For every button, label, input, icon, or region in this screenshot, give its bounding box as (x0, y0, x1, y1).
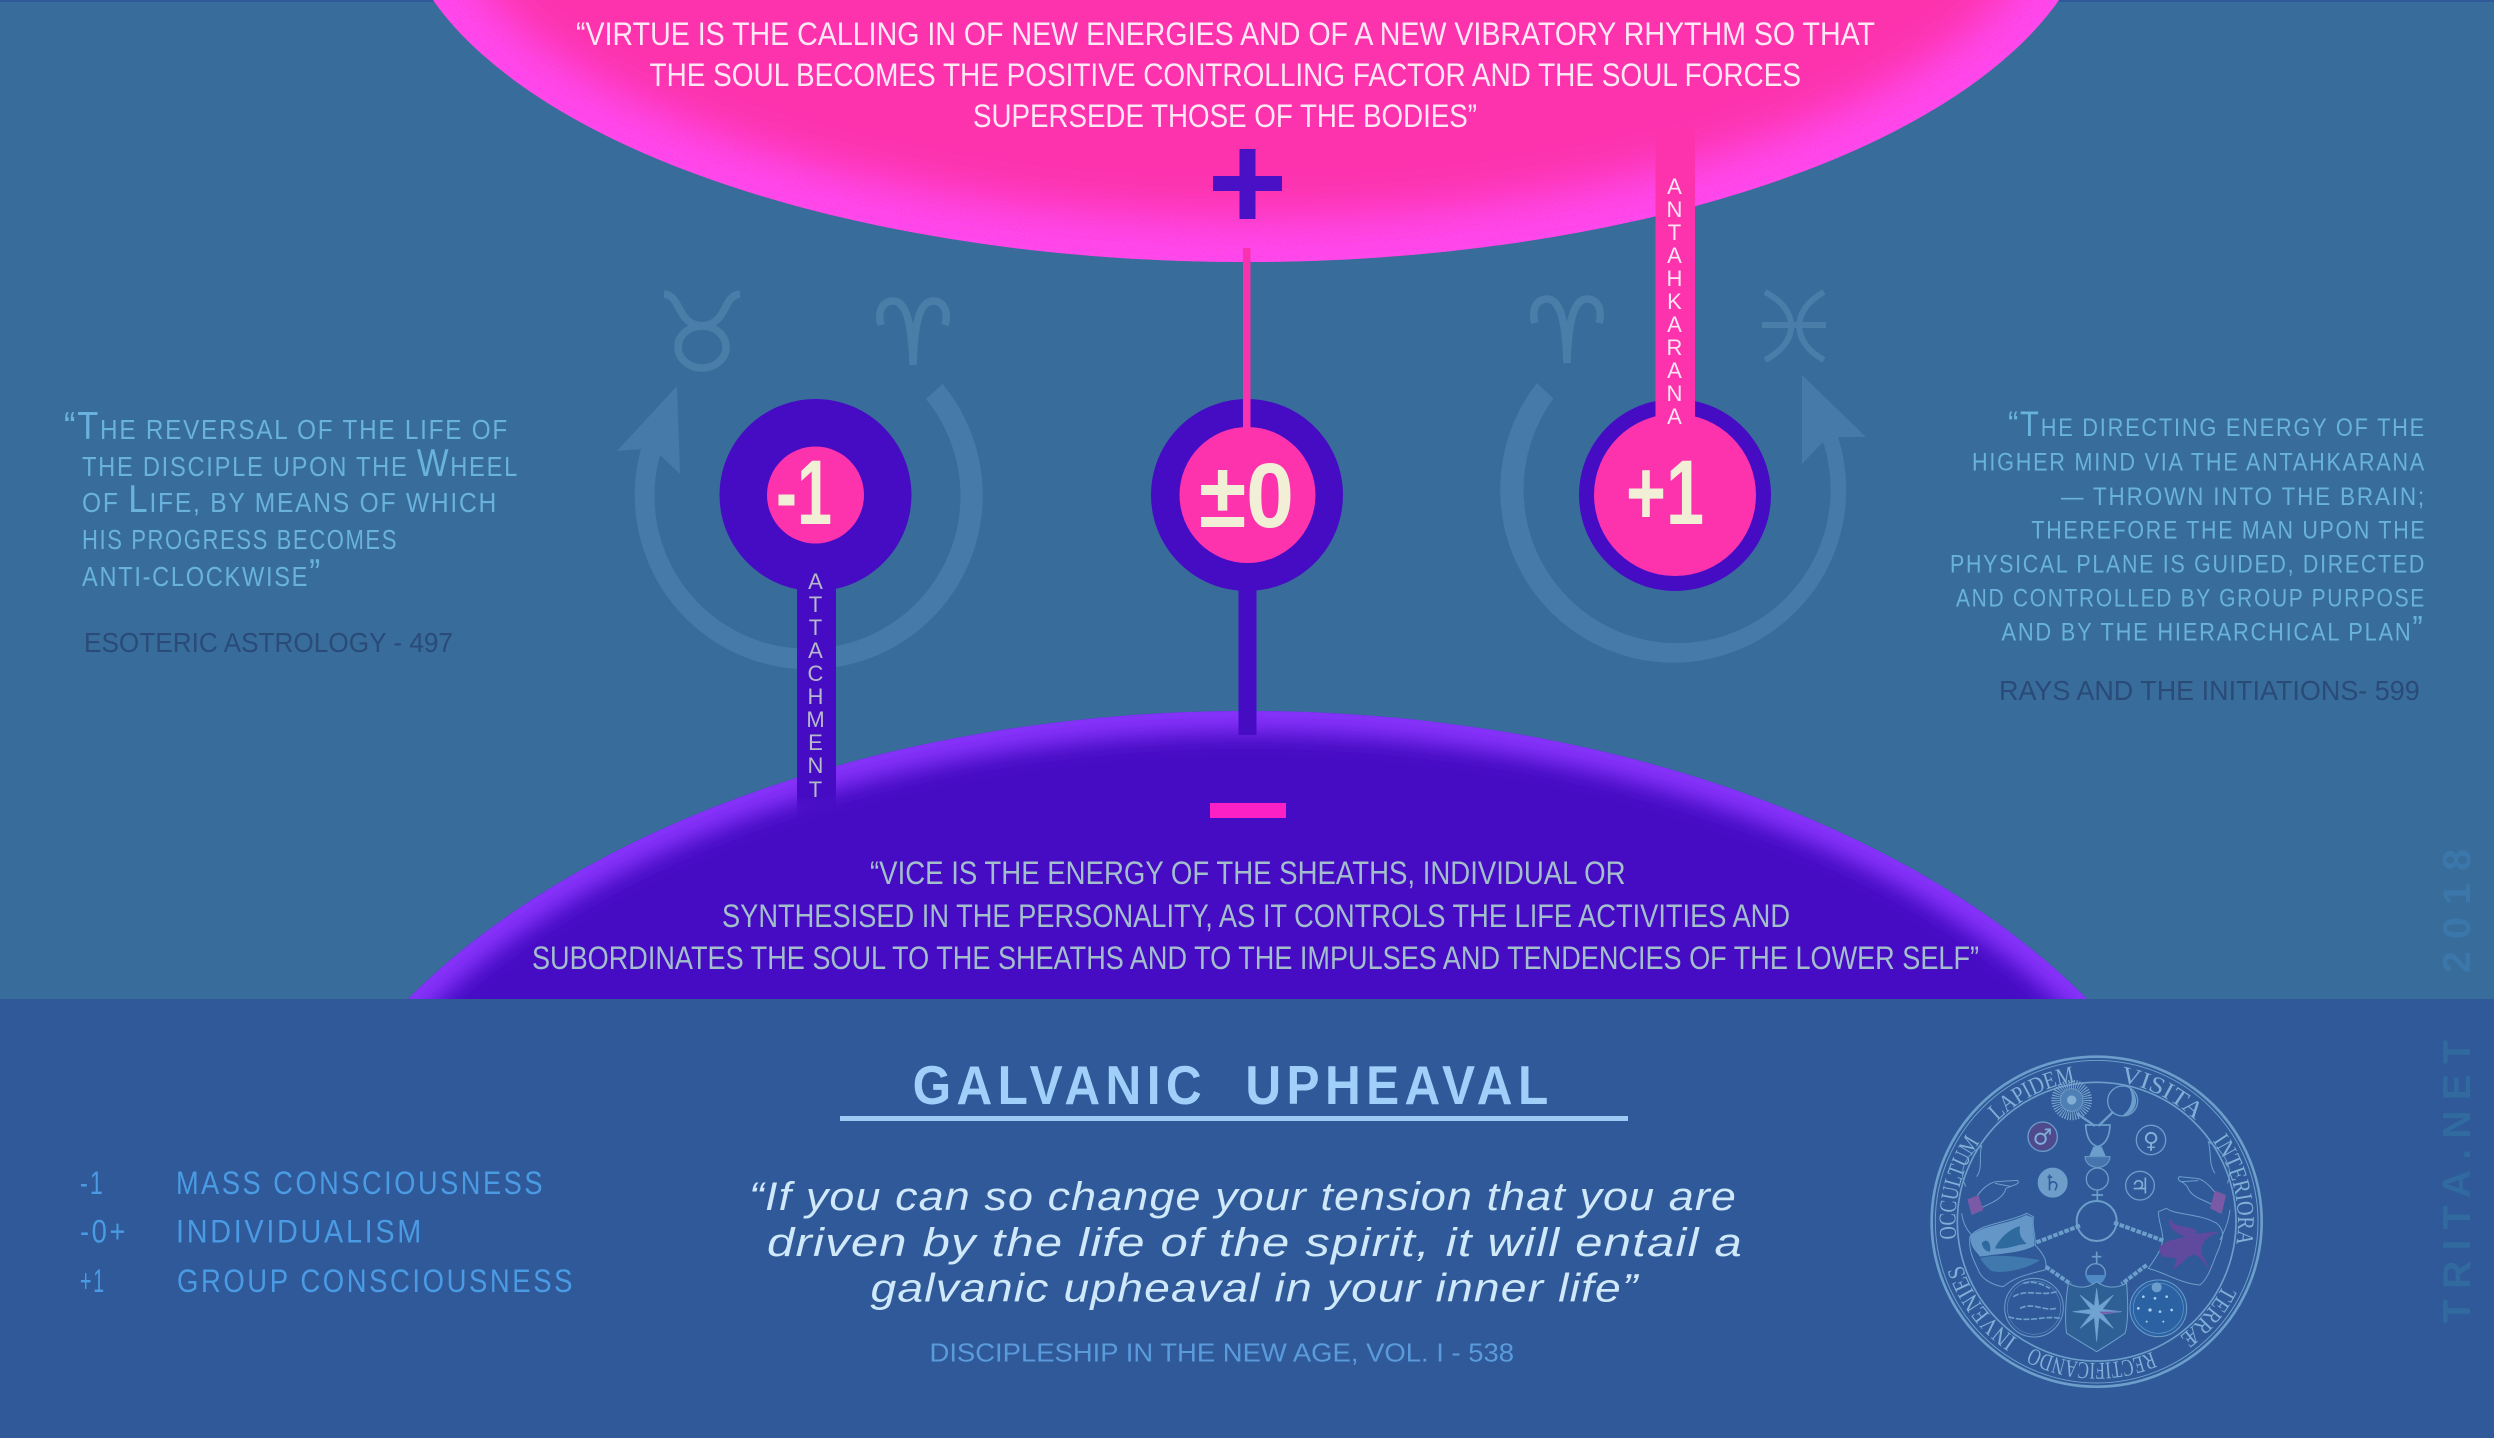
legend row: mass consciousness: -1 (80, 1165, 105, 1201)
bar: antahkarana: T (1668, 220, 1681, 245)
upper sphere: virtue (398, 0, 2094, 262)
bar: antahkarana: A (1667, 243, 1682, 268)
sphere shape (408, 711, 2087, 999)
seal: chalice (2077, 1112, 2113, 1167)
text block: right quote: — THROWN INTO THE BRAIN; (2061, 484, 2426, 511)
bar: antahkarana: A (1667, 174, 1682, 199)
bar: antahkarana: A (1667, 358, 1682, 383)
text block: right quote: HIGHER MIND VIA THE ANTAHKARANA (1972, 450, 2426, 477)
node: minus one: -1 (776, 442, 832, 544)
title underline (840, 1116, 1628, 1121)
sphere shape (433, 0, 2059, 262)
text block: main quote: galvanic upheaval in your inner life” (870, 1267, 1639, 1311)
node: minus one (720, 399, 912, 591)
bar: attachment: T (809, 777, 822, 802)
text block: left quote: “THE REVERSAL OF THE LIFE OF (64, 405, 509, 448)
text block: left quote: ANTI-CLOCKWISE” (82, 552, 322, 595)
seal: starry globe (2130, 1280, 2187, 1337)
seal: planets: ♀ (2143, 1129, 2159, 1154)
text block: virtue quote: THE SOUL BECOMES THE POSITIVE CONTROLLING FACTOR AND THE SOUL FORCES (650, 57, 1801, 93)
seal: left shield (1970, 1213, 2046, 1287)
source: main quote: DISCIPLESHIP IN THE NEW AGE, VOL. I - 538 (930, 1338, 1514, 1368)
text block: virtue quote: “VIRTUE IS THE CALLING IN OF NEW ENERGIES AND OF A NEW VIBRATORY RHYTHM SO THAT (576, 16, 1875, 52)
bar: antahkarana: H (1667, 266, 1682, 291)
seal: right hand (2178, 1142, 2230, 1240)
watermark: site: TRITA.NET (2436, 1040, 2479, 1323)
bar: attachment: N (808, 753, 823, 778)
text block: left quote: THE DISCIPLE UPON THE WHEEL (82, 442, 519, 485)
text block: virtue quote (576, 16, 1875, 134)
text block: left quote: HIS PROGRESS BECOMES (82, 524, 398, 555)
background: upper field (0, 0, 2494, 999)
text block: vice quote: “VICE IS THE ENERGY OF THE SHEATHS, INDIVIDUAL OR (870, 855, 1626, 891)
legend row: individualism (80, 1214, 424, 1250)
zodiac wheel: clockwise arrow with Aries and Pisces (1500, 292, 1866, 663)
seal rings (1932, 1057, 2262, 1387)
text block: vice quote: SUBORDINATES THE SOUL TO THE SHEATHS AND TO THE IMPULSES AND TENDENCIES OF THE LOWER SELF” (532, 940, 1979, 976)
text block: left quote (64, 405, 519, 595)
seal: central alchemical figures (2034, 1168, 2163, 1284)
emblem: VITRIOL seal (1930, 1055, 2263, 1388)
circular arrow: anti-clockwise (617, 384, 983, 669)
text block: right quote: AND CONTROLLED BY GROUP PURPOSE (1956, 586, 2426, 613)
text block: right quote: AND BY THE HIERARCHICAL PLAN” (2002, 610, 2424, 649)
seal: right shield with lion (2148, 1208, 2222, 1285)
bar: antahkarana: R (1667, 335, 1682, 360)
seal lettering: TERRÆ (2180, 1288, 2237, 1348)
legend row: group consciousness: GROUP CONSCIOUSNESS (177, 1263, 575, 1299)
bar: antahkarana: K (1667, 289, 1682, 314)
bar: attachment: A (808, 569, 823, 594)
legend row: mass consciousness: MASS CONSCIOUSNESS (176, 1165, 545, 1201)
text block: left quote: OF LIFE, BY MEANS OF WHICH (82, 478, 498, 521)
seal lettering: INTERIORA (2213, 1132, 2254, 1244)
text block: right quote (1950, 405, 2426, 649)
seal: orb (2086, 1252, 2105, 1285)
text block: right quote: “THE DIRECTING ENERGY OF THE (2008, 405, 2426, 444)
sphere rim glow (408, 711, 2087, 999)
icon: Taurus (664, 294, 740, 368)
watermark: year: 2018 (2436, 849, 2479, 973)
text block: vice quote (532, 855, 1979, 976)
zodiac wheel: anti-clockwise arrow with Taurus and Aries (617, 294, 983, 669)
bar: antahkarana: A (1667, 312, 1682, 337)
icon: Aries (1534, 299, 1600, 363)
text block: right quote: THEREFORE THE MAN UPON THE (2031, 518, 2426, 545)
bar: antahkarana: A (1667, 404, 1682, 429)
seal lettering (1940, 1066, 2254, 1379)
seal: moon (2108, 1086, 2138, 1116)
icon: Pisces (1762, 292, 1826, 360)
bar: antahkarana: N (1667, 197, 1682, 222)
bar: attachment: A (808, 638, 823, 663)
connector: centre pink line (1243, 248, 1250, 430)
seal: planets: ♃ (2130, 1175, 2150, 1200)
text block: main quote (749, 1175, 1743, 1311)
seal: star shield (2066, 1282, 2128, 1352)
bar: antahkarana: N (1667, 381, 1682, 406)
bar: antahkarana (1656, 122, 1695, 429)
text block: virtue quote: SUPERSEDE THOSE OF THE BODIES” (973, 98, 1477, 134)
seal lettering: OCCULTUM (1940, 1134, 1980, 1239)
legend row: individualism: -0+ (80, 1214, 128, 1250)
seal: earth globe (2005, 1278, 2063, 1337)
node: plus minus zero (1151, 399, 1343, 591)
sphere rim glow (398, 0, 2094, 262)
panel: bottom band (0, 999, 2494, 1438)
circular arrow: clockwise (1500, 375, 1866, 663)
seal lettering: RECTIFICANDO (2028, 1349, 2158, 1379)
seal: planets: ♂ (2033, 1126, 2053, 1151)
legend row: group consciousness: +1 (80, 1263, 106, 1299)
seal: sun (2056, 1084, 2088, 1116)
seal lettering: LAPIDEM (1987, 1066, 2074, 1120)
text block: vice quote: SYNTHESISED IN THE PERSONALITY, AS IT CONTROLS THE LIFE ACTIVITIES AND (722, 898, 1790, 934)
lower sphere: vice (408, 711, 2088, 999)
seal: planets: ♄ (2043, 1172, 2063, 1197)
icon: plus sign (1213, 149, 1282, 219)
text block: main quote: driven by the life of the spirit, it will entail a (767, 1221, 1743, 1265)
legend row: individualism: INDIVIDUALISM (176, 1214, 424, 1250)
text block: main quote: “If you can so change your tension that you are (749, 1175, 1737, 1219)
seal lettering: VISITA (2124, 1066, 2199, 1120)
title: GALVANIC UPHEAVAL (913, 1054, 1554, 1116)
bar: attachment: T (809, 592, 822, 617)
label: plus one value: +1 (1626, 442, 1704, 544)
legend row: mass consciousness (80, 1165, 545, 1201)
icon: minus sign (1210, 803, 1286, 818)
connector: centre violet bar (1238, 585, 1256, 735)
node: plus one (1579, 399, 1771, 591)
bar: attachment: E (808, 730, 823, 755)
bar: attachment (797, 569, 836, 826)
seal: planets (2028, 1122, 2166, 1200)
seal lettering: INVENIES (1948, 1266, 2017, 1351)
legend (80, 1165, 575, 1299)
bar: attachment: M (806, 707, 825, 732)
bar: attachment: H (808, 684, 823, 709)
bar: attachment: C (808, 661, 824, 686)
seal: left hand (1962, 1146, 2018, 1237)
source: right quote: RAYS AND THE INITIATIONS- 599 (1999, 675, 2420, 706)
source: left quote: ESOTERIC ASTROLOGY - 497 (84, 627, 453, 658)
text block: right quote: PHYSICAL PLANE IS GUIDED, DIRECTED (1950, 552, 2426, 579)
icon: Aries (880, 301, 946, 365)
node: plus minus zero: ±0 (1199, 445, 1294, 547)
bar: attachment: T (809, 615, 822, 640)
